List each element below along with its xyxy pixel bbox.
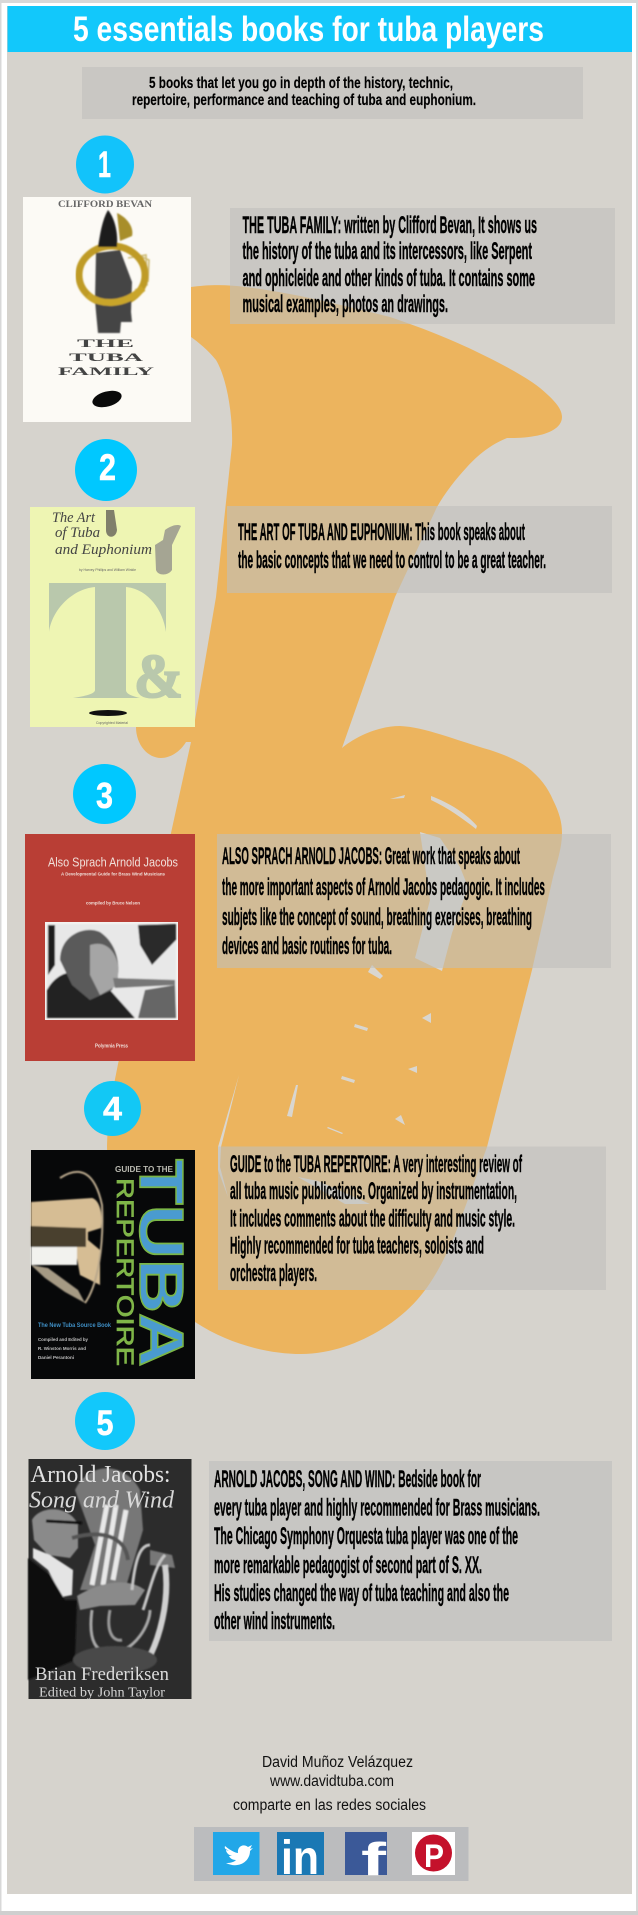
text block 4	[218, 1146, 606, 1290]
book cover 5: Arnold Jacobs, Song and Wind: Arnold Jacobs:	[30, 1462, 170, 1488]
book cover 1: The Tuba Family: CLIFFORD BEVAN	[58, 200, 152, 210]
text block 2	[227, 506, 612, 593]
number badge 5	[75, 1392, 135, 1450]
author credits: comparte en las redes sociales	[233, 1797, 426, 1814]
icon: pinterest	[412, 1832, 455, 1875]
text block 3	[217, 834, 611, 968]
number badge 2	[75, 439, 137, 501]
book cover 4: Guide to the Tuba Repertoire: REPERTOIRE	[111, 1178, 138, 1366]
text block 5: other wind instruments.	[214, 1608, 335, 1635]
number badge 2: 2	[99, 447, 116, 488]
social media bar	[194, 1827, 468, 1885]
book cover 3: Also Sprach Arnold Jacobs: Polymnia Press	[95, 1044, 128, 1050]
author credits: www.davidtuba.com	[269, 1773, 394, 1790]
icon: pinterest: P	[424, 1838, 444, 1874]
book cover 5: Arnold Jacobs, Song and Wind	[28, 1459, 192, 1700]
icon: linkedin: in	[281, 1832, 319, 1885]
book cover 2: The Art of Tuba and Euphonium: by Harvey Phillips and William Winkle	[79, 567, 137, 572]
book cover 3: Also Sprach Arnold Jacobs: A Developmental Guide for Brass Wind Musicians	[61, 872, 165, 876]
text block 5	[209, 1461, 612, 1641]
book cover 4: Guide to the Tuba Repertoire: GUIDE TO THE	[115, 1165, 174, 1174]
book cover 1: The Tuba Family	[23, 197, 191, 422]
book cover 4: Guide to the Tuba Repertoire: Compiled and Edited by	[38, 1337, 88, 1342]
book cover 4: Guide to the Tuba Repertoire: TUBA	[126, 1159, 195, 1367]
book cover 5: Arnold Jacobs, Song and Wind: Edited by John Taylor	[39, 1686, 165, 1700]
author credits	[233, 1754, 426, 1814]
book cover 2: The Art of Tuba and Euphonium	[30, 507, 195, 727]
intro text block: 5 books that let you go in depth of the history, technic,	[149, 75, 453, 92]
book cover 3: Also Sprach Arnold Jacobs: compiled by Bruce Nelson	[86, 900, 140, 906]
intro text block: repertoire, performance and teaching of tuba and euphonium.	[132, 92, 476, 109]
book cover 2: The Art of Tuba and Euphonium: of Tuba	[55, 525, 100, 541]
number badge 3	[73, 764, 136, 824]
book cover 3: Also Sprach Arnold Jacobs: Also Sprach Arnold Jacobs	[48, 856, 178, 870]
book cover 2: The Art of Tuba and Euphonium: The Art	[52, 510, 96, 526]
tuba silhouette	[107, 285, 562, 1354]
book cover 2: The Art of Tuba and Euphonium: and Euphonium	[55, 542, 152, 558]
intro text block	[82, 67, 583, 119]
text block 3: devices and basic routines for tuba.	[222, 933, 392, 960]
author credits: David Muñoz Velázquez	[262, 1754, 413, 1771]
book cover 5: Arnold Jacobs, Song and Wind: Song and Wind	[29, 1488, 175, 1514]
icon: facebook	[345, 1832, 387, 1885]
icon: twitter	[213, 1832, 260, 1875]
number badge 1	[76, 136, 134, 194]
book cover 1: The Tuba Family: TUBA	[69, 350, 144, 364]
icon: facebook: f	[361, 1833, 387, 1885]
number badge 5: 5	[96, 1404, 114, 1443]
book cover 1: The Tuba Family: FAMILY	[58, 364, 155, 378]
book cover 4: Guide to the Tuba Repertoire	[31, 1150, 195, 1379]
book cover 1: The Tuba Family: THE	[77, 336, 134, 350]
number badge 4	[84, 1081, 141, 1136]
book cover 4: Guide to the Tuba Repertoire: R. Winston Morris and	[38, 1346, 86, 1351]
number badge 4: 4	[103, 1090, 123, 1127]
number badge 1: 1	[98, 144, 111, 185]
book cover 4: Guide to the Tuba Repertoire: Daniel Perantoni	[38, 1355, 74, 1360]
book cover 3: Also Sprach Arnold Jacobs	[25, 834, 195, 1061]
text block 4: orchestra players.	[230, 1260, 317, 1287]
book cover 2: The Art of Tuba and Euphonium: &	[134, 643, 183, 711]
text block 1	[230, 208, 615, 324]
book cover 2: The Art of Tuba and Euphonium: Copyrighted Material	[96, 721, 128, 725]
book cover 5: Arnold Jacobs, Song and Wind: Brian Frederiksen	[35, 1664, 169, 1685]
number badge 3: 3	[96, 775, 113, 816]
book cover 4: Guide to the Tuba Repertoire: The New Tuba Source Book	[38, 1323, 112, 1329]
